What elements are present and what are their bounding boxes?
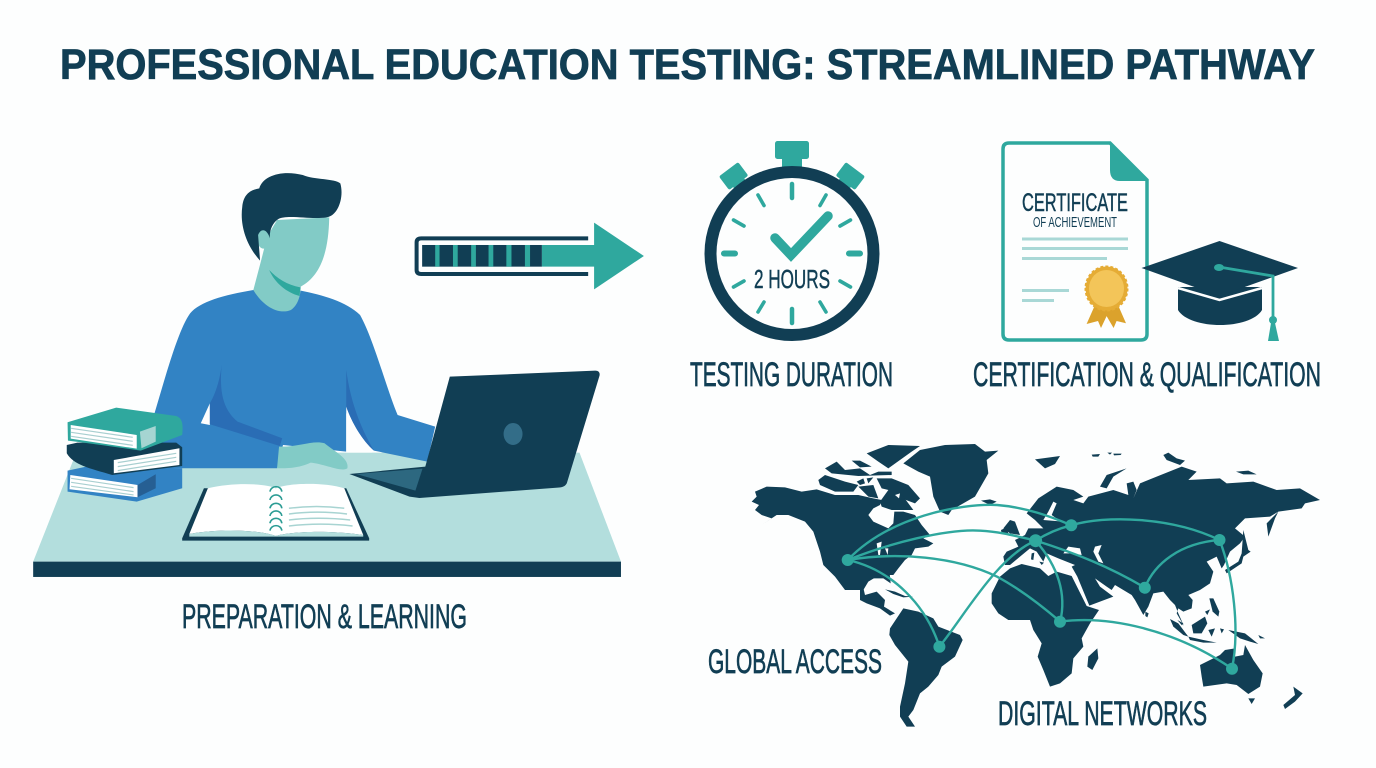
hair: [242, 173, 342, 261]
southeast asia and oceania: [1145, 598, 1303, 709]
hand: [277, 442, 348, 470]
arrow: progress bar: [417, 223, 644, 289]
clock text: 2 HOURS: [754, 264, 830, 294]
label: testing duration: TESTING DURATION: [690, 356, 893, 394]
title: PROFESSIONAL EDUCATION TESTING: STREAMLINED PATHWAY: [60, 41, 1315, 89]
network nodes: [842, 519, 1238, 675]
icon: stopwatch: [710, 141, 874, 335]
north america and arctic: [752, 444, 998, 590]
desk: [33, 453, 621, 577]
label: preparation and learning: PREPARATION & LEARNING: [182, 598, 467, 636]
ribbon seal: [1086, 266, 1128, 328]
label: global access: GLOBAL ACCESS: [708, 643, 882, 681]
certificate heading: CERTIFICATE: [1022, 189, 1128, 217]
icon: certificate: [1003, 143, 1147, 340]
open notebook: [182, 484, 369, 541]
certificate subheading: OF ACHIEVEMENT: [1033, 214, 1117, 231]
certificate text lines: [1022, 238, 1128, 302]
check mark: [775, 216, 828, 255]
person: [149, 173, 435, 470]
africa, south america, central america: [860, 564, 1099, 727]
laptop: [349, 371, 600, 498]
icon: graduation cap: [1142, 241, 1298, 341]
network links: [848, 505, 1235, 669]
label: digital networks: DIGITAL NETWORKS: [998, 695, 1207, 733]
neck and face: [253, 217, 329, 311]
panel: preparation and learning scene: [33, 173, 621, 577]
clock ticks: [724, 184, 860, 323]
books stack: [67, 408, 183, 502]
eurasia and arctic islands: [1001, 453, 1320, 626]
world map: [752, 444, 1320, 727]
